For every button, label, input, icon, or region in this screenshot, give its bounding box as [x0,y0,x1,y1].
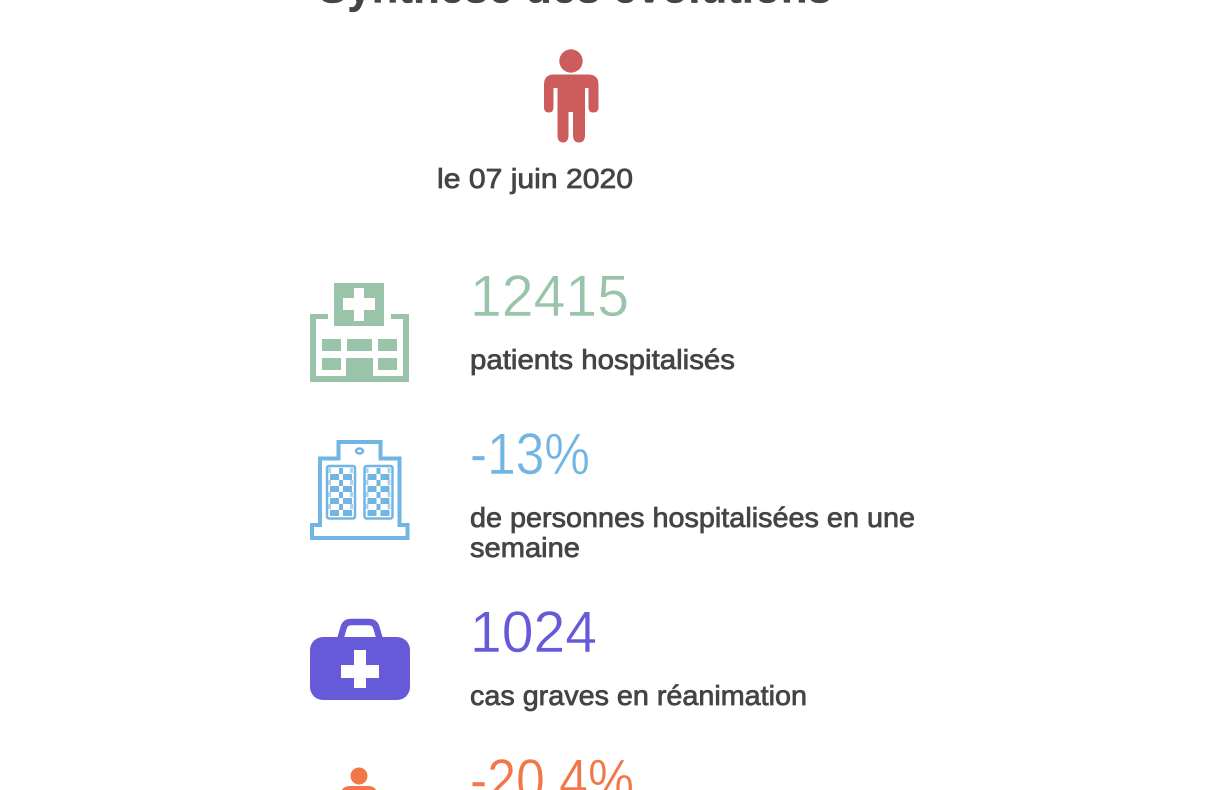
icon: person [544,49,598,142]
stat: patients hospitalisés [310,264,735,382]
value: 12415: 12415 [470,264,629,329]
icon: hospital [310,283,409,382]
stat: personnes hospitalisées [312,422,915,563]
value: 1024: 1024 [470,600,597,665]
label: de personnes hospitalisées en une semaine: de personnes hospitalisées en une [470,502,915,533]
icon: hospital building [312,442,408,538]
label: patients hospitalisés: patients hospitalisés [470,344,735,375]
value: -13%: -13% [470,422,590,487]
icon: medical case [310,622,410,700]
stat: cas graves [310,600,807,711]
icon: person orange [341,768,377,790]
label: de personnes hospitalisées en une semaine: semaine [470,532,580,563]
stat: -20,4% [341,748,634,790]
label: de personnes hospitalisées en une semaine [470,502,915,563]
date: le 07 juin 2020 [437,163,633,194]
label: cas graves en réanimation: cas graves en réanimation [470,680,807,711]
